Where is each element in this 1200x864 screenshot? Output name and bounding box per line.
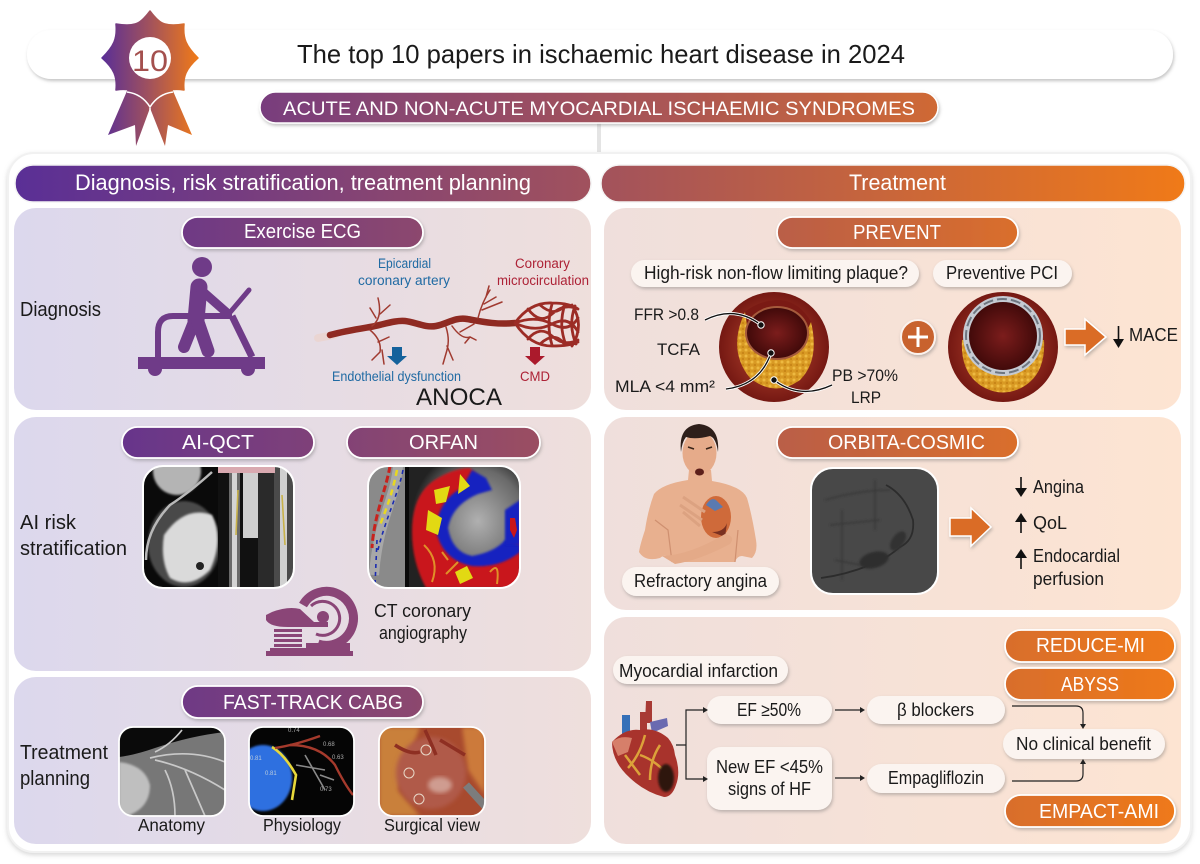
label: Diagnosis: Diagnosis bbox=[20, 299, 101, 321]
result: improved endocardial perfusion: perfusion bbox=[1033, 569, 1104, 589]
labels and leader lines: plaque features: FFR >0.8 bbox=[634, 305, 699, 324]
icon: award medal bbox=[102, 11, 198, 146]
pill: ORFAN: ORFAN bbox=[409, 432, 478, 454]
label: coronary microcirculation: microcirculation bbox=[497, 273, 589, 288]
pill: AI-QCT bbox=[122, 427, 314, 458]
panel: PREVENT bbox=[604, 208, 1181, 410]
arrow: CMD bbox=[525, 347, 545, 365]
pill: EMPACT-AMI: EMPACT-AMI bbox=[1039, 801, 1159, 823]
label: AI risk stratification: stratification bbox=[20, 538, 127, 560]
image: ORFAN perivascular map bbox=[368, 466, 520, 588]
box: no clinical benefit: No clinical benefit bbox=[1016, 734, 1151, 754]
icon: plus bbox=[901, 320, 935, 354]
pill: Exercise ECG: Exercise ECG bbox=[244, 221, 361, 243]
label: Treatment planning: Treatment bbox=[20, 742, 108, 764]
label: ANOCA: ANOCA bbox=[416, 384, 502, 411]
pill: REDUCE-MI: REDUCE-MI bbox=[1036, 635, 1145, 657]
pill: ABYSS: ABYSS bbox=[1061, 674, 1119, 696]
image: physiology FFR map bbox=[234, 727, 354, 816]
pill: ORBITA-COSMIC bbox=[777, 427, 1018, 458]
pill: AI-QCT: AI-QCT bbox=[182, 432, 254, 454]
image: physiology FFR map: 0.81 bbox=[265, 771, 277, 777]
icon: treadmill bbox=[138, 257, 265, 376]
diagram: vulnerable plaque cross-section bbox=[719, 292, 829, 402]
connector bbox=[597, 123, 601, 155]
subtitle banner: ACUTE AND NON-ACUTE MYOCARDIAL ISCHAEMIC SYNDROMES bbox=[283, 99, 915, 120]
banner: treatment: Treatment bbox=[849, 170, 946, 195]
panel: AI risk stratification bbox=[14, 417, 591, 671]
image: physiology FFR map: 0.74 bbox=[288, 728, 300, 734]
image: physiology FFR map: 0.63 bbox=[332, 755, 344, 761]
label: epicardial coronary artery: coronary artery bbox=[358, 273, 450, 288]
pill: FAST-TRACK CABG bbox=[182, 686, 423, 718]
box: preventive PCI bbox=[933, 260, 1072, 287]
result: reduced angina: Angina bbox=[1033, 477, 1085, 497]
result: reduced MACE: MACE bbox=[1129, 325, 1178, 345]
box: preventive PCI: Preventive PCI bbox=[946, 263, 1058, 283]
box: refractory angina bbox=[622, 567, 779, 596]
box: empagliflozin: Empagliflozin bbox=[888, 768, 984, 788]
title bar: The top 10 papers in ischaemic heart disease in 2024 bbox=[297, 39, 905, 69]
labels and leader lines: plaque features: PB >70% bbox=[832, 366, 898, 385]
labels and leader lines: plaque features bbox=[615, 305, 898, 407]
image: physiology FFR map: 0.81 bbox=[250, 756, 262, 762]
pill: ORBITA-COSMIC: ORBITA-COSMIC bbox=[828, 432, 985, 454]
image: angiogram bbox=[811, 468, 938, 594]
pill: FAST-TRACK CABG: FAST-TRACK CABG bbox=[223, 692, 403, 714]
labels and leader lines: plaque features: TCFA bbox=[657, 340, 701, 359]
box: new EF below 45%: signs of HF bbox=[728, 779, 811, 799]
result: improved endocardial perfusion: Endocardial bbox=[1033, 546, 1120, 566]
arrow: endothelial dysfunction bbox=[387, 347, 407, 365]
label: Anatomy: Anatomy bbox=[138, 815, 205, 835]
illustration: man with chest pain bbox=[639, 424, 756, 564]
label: coronary microcirculation bbox=[497, 256, 589, 288]
illustration: heart bbox=[612, 701, 678, 797]
pill: ABYSS bbox=[1005, 668, 1175, 700]
panel: treatment planning bbox=[14, 677, 591, 844]
result: reduced MACE bbox=[1113, 325, 1178, 348]
box: beta blockers bbox=[867, 696, 1005, 724]
arrow: to MACE bbox=[1065, 319, 1106, 355]
label: AI risk stratification bbox=[20, 512, 127, 560]
arrows: flow connectors bbox=[676, 706, 1086, 782]
label: Surgical view: Surgical view bbox=[384, 815, 480, 835]
label: AI risk stratification: AI risk bbox=[20, 512, 77, 534]
label: Physiology: Physiology bbox=[263, 815, 341, 835]
panel: myocardial infarction bbox=[604, 617, 1181, 844]
title bar bbox=[27, 30, 1173, 79]
label: Treatment planning bbox=[20, 742, 108, 790]
box: EF at least 50% bbox=[707, 696, 832, 724]
panel: ORBITA-COSMIC bbox=[604, 417, 1181, 610]
result: improved QoL bbox=[1015, 513, 1067, 533]
box: myocardial infarction bbox=[613, 656, 788, 684]
pill: ORFAN bbox=[347, 427, 540, 458]
diagram: coronary artery bbox=[318, 286, 578, 364]
labels and leader lines: plaque features: LRP bbox=[851, 388, 881, 407]
pill: REDUCE-MI bbox=[1005, 630, 1175, 662]
image: anatomy CT bbox=[119, 727, 225, 818]
pill: Exercise ECG bbox=[182, 217, 423, 248]
label: CT coronary angiography bbox=[374, 601, 471, 643]
box: EF at least 50%: EF ≥50% bbox=[737, 700, 801, 720]
box: beta blockers: β blockers bbox=[897, 700, 974, 720]
label: CT coronary angiography: CT coronary bbox=[374, 601, 471, 621]
box: refractory angina: Refractory angina bbox=[634, 571, 768, 591]
icon: award medal: 10 bbox=[132, 45, 168, 78]
result: improved QoL: QoL bbox=[1033, 513, 1067, 533]
box: empagliflozin bbox=[867, 764, 1005, 793]
image: physiology FFR map: 0.73 bbox=[320, 787, 332, 793]
banner: diagnosis: Diagnosis, risk stratification, treatment planning bbox=[75, 170, 531, 195]
box: high-risk plaque question: High-risk non-flow limiting plaque? bbox=[644, 263, 908, 283]
pill: EMPACT-AMI bbox=[1005, 795, 1175, 827]
subtitle banner bbox=[260, 92, 938, 123]
panel: diagnosis bbox=[14, 208, 591, 411]
image: AI-QCT CT scan bbox=[142, 465, 295, 589]
label: coronary microcirculation: Coronary bbox=[515, 256, 570, 271]
banner: diagnosis bbox=[15, 165, 591, 202]
image: surgical view bbox=[379, 727, 485, 816]
label: Treatment planning: planning bbox=[20, 768, 90, 790]
banner: treatment bbox=[601, 165, 1185, 202]
pill: PREVENT bbox=[777, 217, 1018, 248]
diagram: stented vessel cross-section bbox=[948, 292, 1058, 402]
icon: CT scanner bbox=[266, 591, 353, 656]
labels and leader lines: plaque features: MLA <4 mm² bbox=[615, 377, 715, 396]
pill: PREVENT: PREVENT bbox=[853, 222, 941, 244]
box: no clinical benefit bbox=[1003, 729, 1165, 759]
image: physiology FFR map: 0.68 bbox=[323, 742, 335, 748]
label: epicardial coronary artery: Epicardial bbox=[378, 256, 431, 271]
label: epicardial coronary artery bbox=[358, 256, 450, 288]
label: endothelial dysfunction: Endothelial dysfunction bbox=[332, 368, 461, 384]
box: new EF below 45% bbox=[707, 747, 832, 810]
outer frame bbox=[8, 153, 1191, 852]
box: myocardial infarction: Myocardial infarction bbox=[619, 661, 778, 681]
result: improved endocardial perfusion bbox=[1015, 546, 1120, 589]
arrow: to outcomes bbox=[950, 508, 991, 546]
box: new EF below 45%: New EF <45% bbox=[716, 757, 823, 777]
label: CT coronary angiography: angiography bbox=[379, 623, 467, 643]
label: CMD: CMD bbox=[520, 368, 550, 384]
